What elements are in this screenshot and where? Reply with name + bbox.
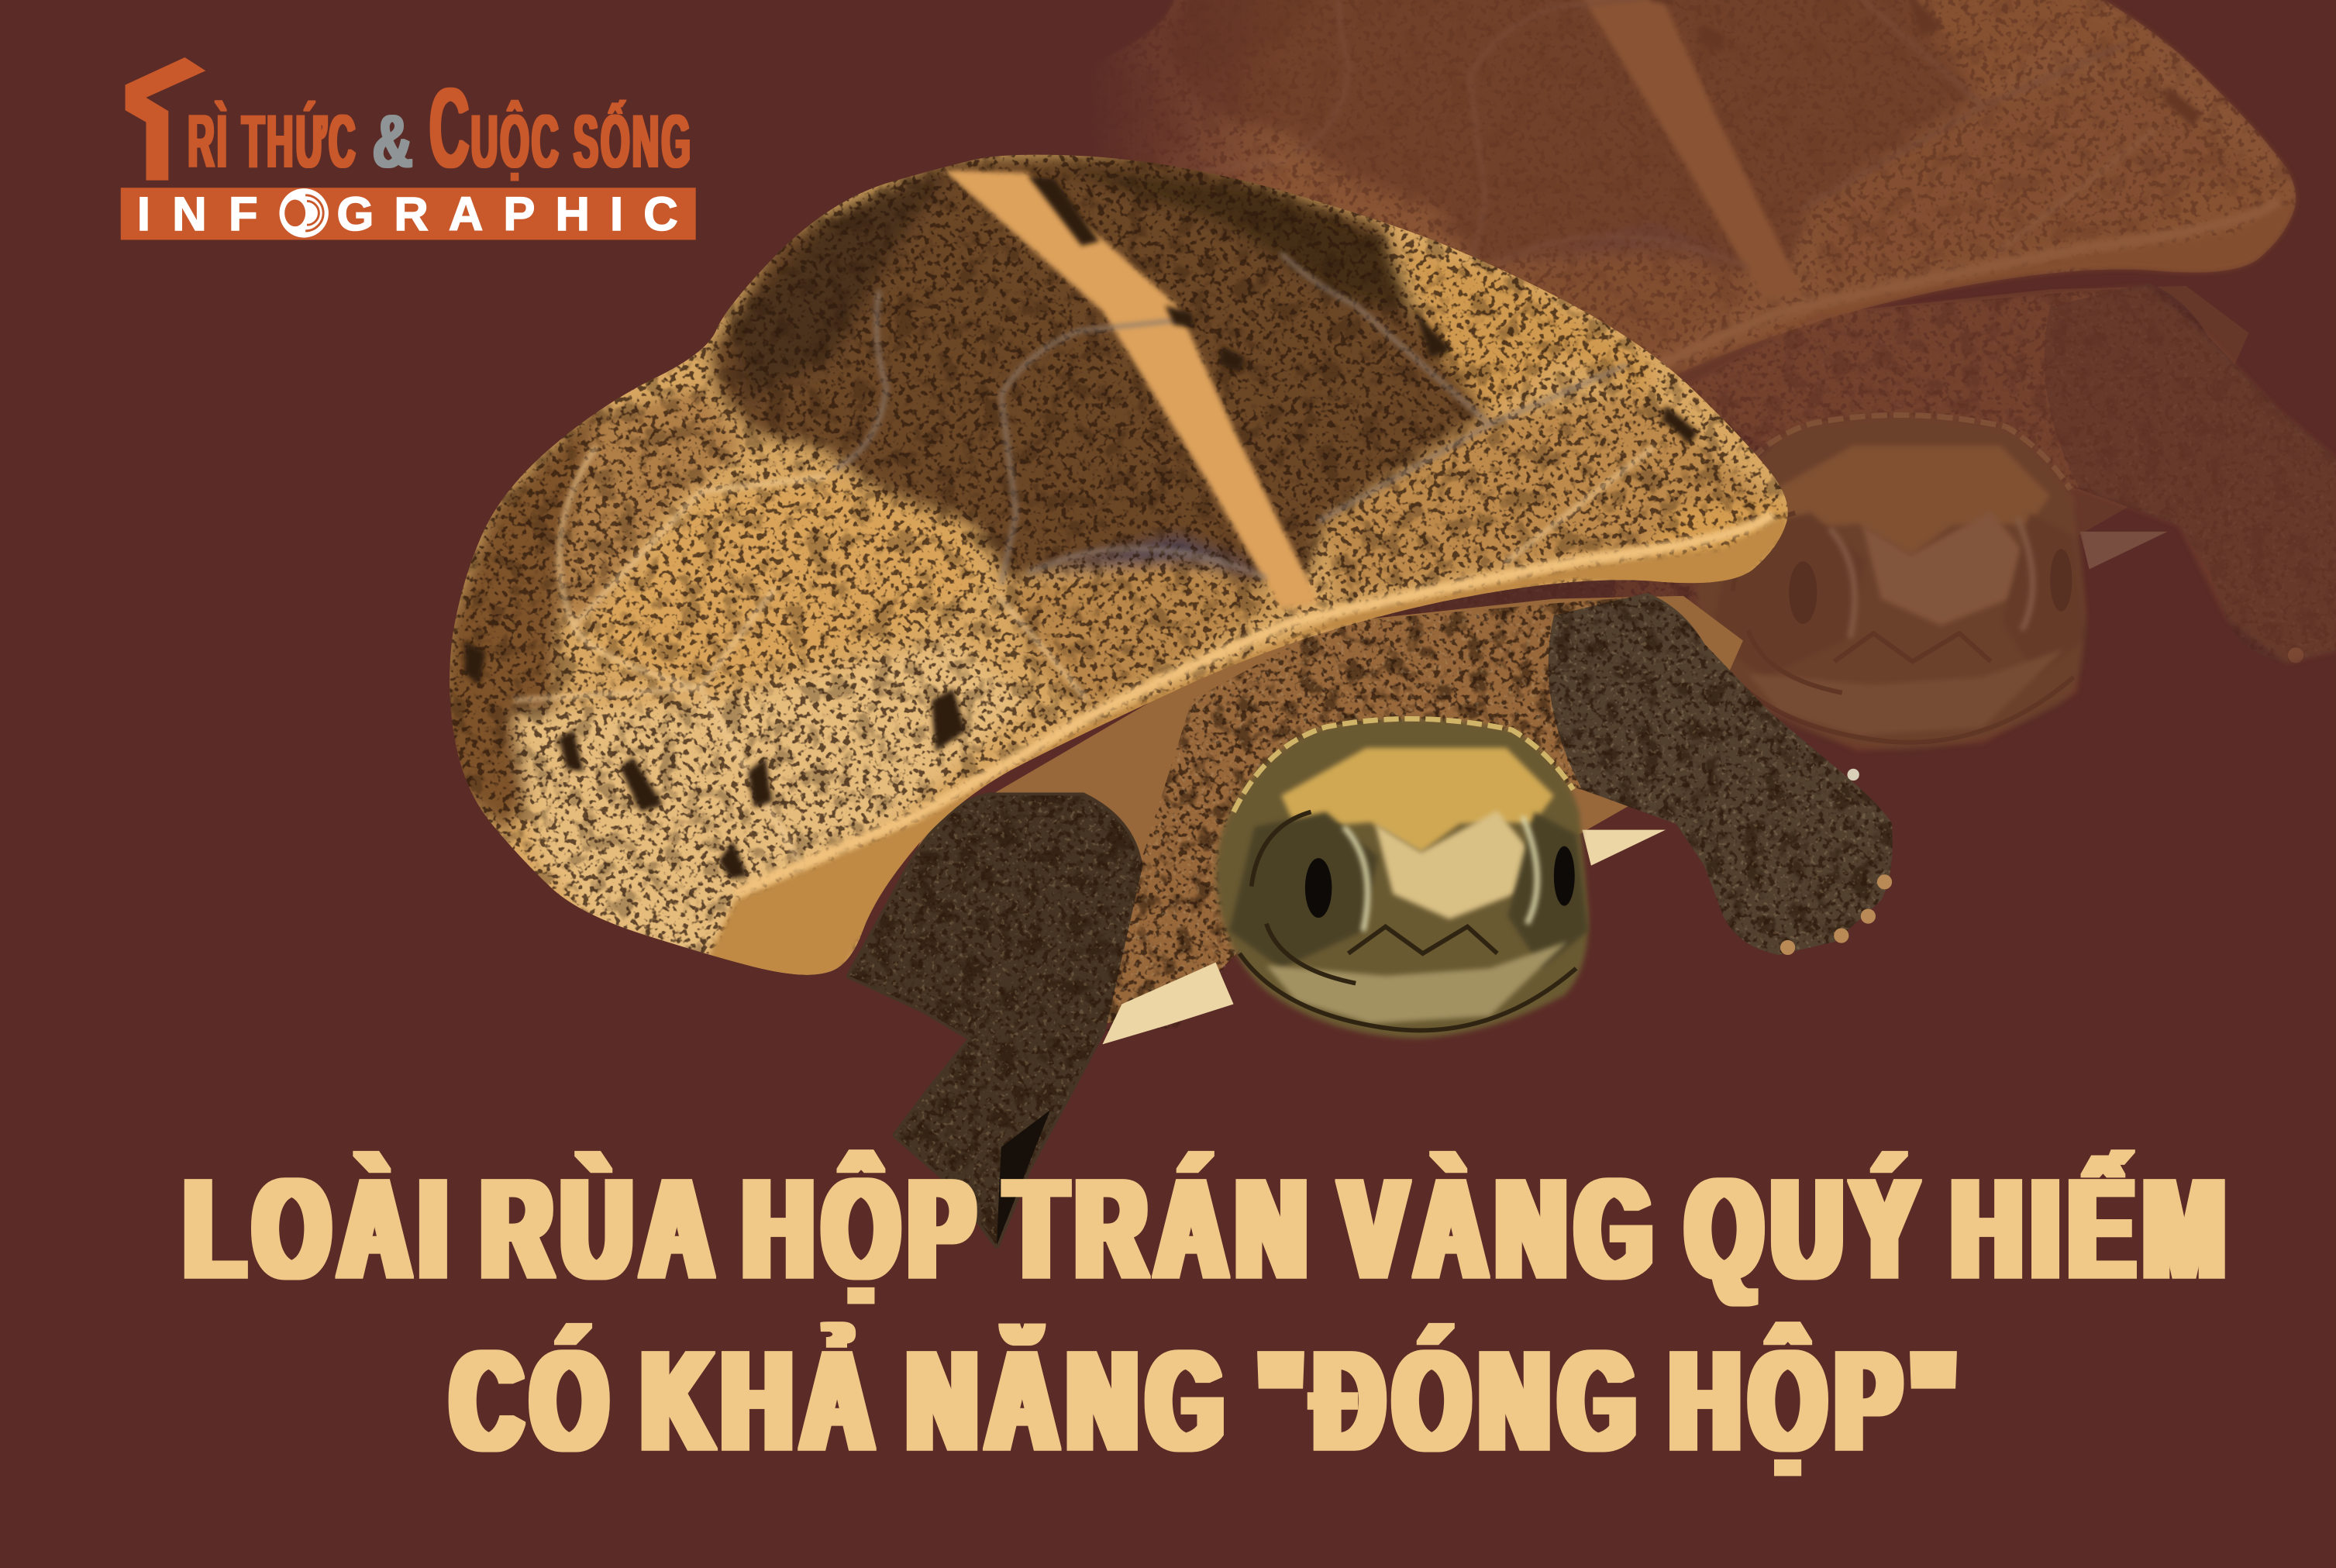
left front leg: [849, 795, 1139, 1246]
rim underside: [700, 514, 1786, 984]
skin speckle texture: [834, 581, 1907, 1252]
left mid scute: [554, 388, 745, 625]
title: [184, 1149, 2234, 1480]
logo: Tri thức & Cuộc sống Infographic: [121, 57, 696, 241]
logo T mark: [126, 57, 205, 181]
turtle skin and body: [864, 596, 1743, 1028]
infographic circle icon: [279, 188, 329, 238]
shell mottling: [432, 134, 1817, 998]
logo: Tri thức & Cuộc sống Infographic: C: [429, 64, 470, 191]
infographic bar: [121, 188, 696, 240]
logo: Tri thức & Cuộc sống Infographic: RÌ THỨC: [188, 100, 357, 183]
head base: [1216, 719, 1588, 1039]
shell colour regions: [432, 134, 1817, 998]
purple band: [1028, 536, 1266, 574]
shell speckle texture: [432, 134, 1817, 998]
eye rims: [1344, 816, 1537, 931]
ghost turtle image in the background: [1125, 0, 2336, 750]
pale scute seams: [514, 447, 1654, 871]
ghost silhouette: [1153, 0, 2336, 751]
leg tail shadow: [997, 1110, 1050, 1246]
head rim: [1234, 719, 1573, 812]
light centre-left scute: [588, 477, 984, 685]
scute seams: [834, 253, 1627, 584]
rim tip: [1638, 499, 1793, 566]
right eye patch: [1507, 812, 1588, 968]
left eye patch: [1229, 812, 1378, 968]
face stripes: [1239, 812, 1576, 1030]
infographic text: GRAPHIC: GRAPHIC: [336, 188, 678, 241]
lower pale scutes: [514, 640, 1028, 968]
left rim: [450, 406, 608, 837]
logo ampersand: &: [373, 100, 413, 183]
plastron pieces: [1102, 830, 1666, 1044]
forehead: [1281, 748, 1554, 852]
turtle photo: [432, 134, 1907, 1252]
infographic text: INF: INF: [137, 188, 258, 241]
logo text: uộc sống: UỘC SỐNG: [470, 99, 693, 183]
dark blotches: [465, 176, 1698, 879]
dark scutes: [708, 149, 1488, 588]
right top orange patch: [1401, 246, 1654, 411]
vertebral stripe: [943, 170, 1318, 609]
right side scute: [1328, 391, 1773, 599]
chin: [1266, 942, 1567, 1023]
head: [1216, 719, 1588, 1039]
right front leg: [1549, 593, 1893, 955]
shell rim highlight: [736, 514, 1773, 892]
eyes: [1305, 846, 1575, 918]
darkest upper area: [730, 167, 953, 402]
shell: [432, 134, 1817, 998]
nose bridge: [1375, 811, 1535, 919]
lower centre scute: [1005, 559, 1281, 715]
toes: [1780, 769, 1892, 955]
ghost photo detail: [1166, 0, 2336, 744]
